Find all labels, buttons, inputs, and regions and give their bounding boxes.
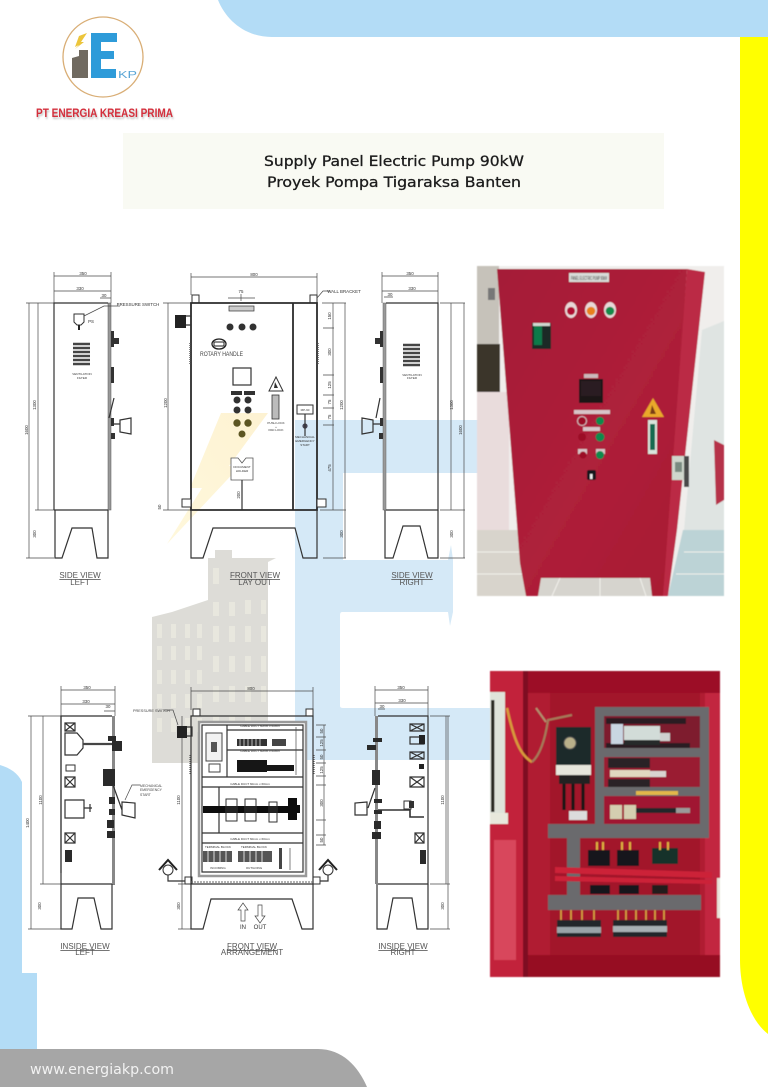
drawing: front view lay out: 75 — [327, 414, 332, 419]
drawing: front view arrangement: 50 — [319, 728, 324, 733]
footer website: www.energiakp.com — [30, 1062, 174, 1078]
drawing: inside view left: EMERGENCY — [140, 788, 163, 792]
logo bolt — [75, 33, 87, 49]
caption inside view right: RIGHT — [391, 948, 416, 957]
drawing: side view right: 300 — [449, 530, 454, 538]
drawing: front view arrangement: CABLE DUCT 60mm x 60mm — [230, 837, 270, 841]
drawing: inside view left: START — [140, 793, 151, 797]
drawing: inside view left — [25, 685, 163, 957]
drawing: front view arrangement: 125 — [319, 766, 324, 774]
logo letter E — [91, 33, 117, 78]
nameplate — [569, 273, 609, 282]
drawing: front view arrangement: 1100 — [176, 795, 181, 805]
caption side view right — [391, 571, 433, 587]
drawing: front view arrangement — [133, 686, 337, 957]
drawing: front view lay out: 475 — [327, 464, 332, 472]
lower terminal blocks — [557, 910, 667, 937]
cabinet front — [497, 269, 687, 596]
drawing: front view arrangement: 800 — [247, 686, 255, 691]
pressure switch label — [133, 709, 178, 725]
drawing: side view left: PRESSURE SWITCH — [117, 302, 159, 307]
main breaker — [556, 727, 591, 820]
drawing: inside view left: 1400 — [25, 818, 30, 828]
caption inside view left: INSIDE VIEW — [60, 942, 110, 951]
drawing: inside view left: 350 — [83, 685, 91, 690]
right yellow side bar — [740, 37, 768, 1034]
caption side view right: SIDE VIEW — [391, 571, 433, 580]
drawing: front view arrangement: 50 — [319, 754, 324, 759]
caption inside view right: INSIDE VIEW — [378, 942, 428, 951]
power meter — [579, 374, 603, 403]
drawing: front view lay out: 1200 — [163, 398, 168, 408]
wall bracket label: WALL BRACKET — [327, 289, 361, 294]
wall bracket label — [317, 289, 361, 298]
caption inside view left — [60, 942, 110, 957]
caption side view left: SIDE VIEW — [59, 571, 101, 580]
drawing: front view arrangement: CABLE DUCT 60mm x 60mm — [240, 724, 280, 728]
drawing: side view left — [24, 271, 159, 587]
drawing: front view lay out: 125 — [327, 381, 332, 389]
drawing: front view lay out: 800 — [250, 272, 258, 277]
title line one: Supply Panel Electric Pump 90kW — [264, 153, 524, 170]
drawing: front view arrangement: INCOMING — [210, 866, 226, 870]
drawing: side view right: VENTILATION — [402, 373, 422, 377]
drawing: front view lay out: 300 — [327, 348, 332, 356]
push buttons — [574, 410, 610, 480]
company name: PT ENERGIA KREASI PRIMA — [36, 108, 173, 120]
left blue side shape — [0, 765, 37, 1050]
drawing: front view lay out: MP-90 — [301, 408, 310, 412]
caption side view left: LEFT — [70, 578, 90, 587]
drawing: front view arrangement: 300 — [176, 902, 181, 910]
door latch — [672, 456, 689, 487]
drawing: side view left: 1300 — [32, 400, 37, 410]
caption side view left — [59, 571, 101, 587]
drawing: side view left: FILTER — [77, 376, 88, 380]
drawing: side view right: 350 — [406, 271, 414, 276]
title line two: Proyek Pompa Tigaraksa Banten — [267, 174, 521, 191]
contactors and red bars — [555, 842, 712, 894]
drawing: front view lay out — [157, 272, 361, 587]
drawing: side view left: 30 — [102, 293, 107, 298]
drawing: front view lay out: MECHANICAL — [295, 435, 315, 439]
drawing: front view arrangement: CABLE DUCT 60mm x 60mm — [230, 782, 270, 786]
drawing: front view lay out: 1200 — [339, 400, 344, 410]
caption inside view right — [378, 942, 428, 957]
drawing: front view lay out: 200 — [236, 491, 241, 499]
caption front view lay out: LAY OUT — [238, 578, 272, 587]
drawing: front view arrangement: 300 — [319, 799, 324, 807]
drawing: front view lay out: PAD LOCK — [269, 428, 283, 432]
drawing: front view arrangement: OUTGOING — [246, 866, 263, 870]
drawing: side view right: 330 — [408, 286, 416, 291]
upper compartment components — [604, 716, 700, 824]
caption front view arrangement — [221, 942, 283, 957]
logo building — [72, 50, 88, 78]
drawing: inside view right — [355, 685, 450, 957]
drawing: front view arrangement: 125 — [319, 739, 324, 747]
watermark lightning — [167, 413, 268, 544]
drawing: side view left: VENTILATION — [72, 372, 92, 376]
photo: interior of red panel — [490, 671, 720, 977]
drawing: inside view right: 300 — [440, 902, 445, 910]
drawing: front view lay out: DOCUMENT — [233, 465, 251, 469]
top right blue header shape — [218, 0, 768, 37]
rotary switch — [532, 323, 551, 349]
drawing: side view left: 300 — [32, 530, 37, 538]
drawing: side view right: 1300 — [449, 400, 454, 410]
photo background — [477, 266, 724, 596]
watermark letter E — [295, 420, 497, 760]
grey mounting frame — [548, 707, 709, 910]
drawing: front view lay out: PUSH LOCK — [267, 421, 285, 425]
drawing: front view arrangement: 50 — [319, 837, 324, 842]
drawing: side view left: 1600 — [24, 425, 29, 435]
drawing: front view lay out: ROTARY HANDLE — [200, 352, 243, 358]
watermark building — [152, 550, 276, 763]
drawing: front view lay out: 300 — [339, 530, 344, 538]
drawing: front view lay out: EMERGENCY — [295, 439, 315, 443]
drawing: front view lay out: 75 — [327, 399, 332, 404]
warning sticker — [642, 398, 664, 454]
drawing: side view left: 330 — [76, 286, 84, 291]
drawing: side view right: FILTER — [407, 376, 418, 380]
in and out arrows: IN — [240, 925, 246, 931]
drawing: inside view left: 330 — [82, 699, 90, 704]
caption inside view left: LEFT — [75, 948, 95, 957]
drawing: front view arrangement: TERMINAL BLOCK — [241, 845, 267, 849]
drawing: front view lay out: + — [275, 425, 277, 429]
drawing: front view lay out: START — [300, 443, 310, 447]
drawing: side view left: PS — [88, 319, 94, 324]
caption front view lay out — [230, 571, 280, 587]
grounding symbols — [159, 860, 337, 881]
wiring — [507, 708, 572, 762]
caption front view arrangement: FRONT VIEW — [227, 942, 277, 951]
logo — [63, 17, 143, 97]
footer bar — [0, 1049, 367, 1087]
drawing: inside view left: 1100 — [38, 795, 43, 805]
drawing: side view right — [362, 271, 465, 587]
logo KP: KP — [118, 70, 137, 81]
drawing: inside view right: 350 — [397, 685, 405, 690]
drawing: front view lay out: 75 — [239, 289, 244, 294]
watermark: building, lightning and letter E — [152, 413, 497, 763]
drawing: front view lay out: 150 — [327, 312, 332, 320]
door terminal strip — [490, 692, 508, 824]
enclosure — [490, 671, 720, 977]
in and out arrows — [238, 903, 267, 931]
title panel — [123, 133, 664, 209]
drawing: side view right: 1600 — [458, 425, 463, 435]
drawing: inside view right: 330 — [398, 698, 406, 703]
logo circle — [63, 17, 143, 97]
drawing: front view lay out: 50 — [157, 504, 162, 509]
drawing: side view left: 350 — [79, 271, 87, 276]
caption side view right: RIGHT — [400, 578, 425, 587]
drawing: inside view right: 30 — [380, 704, 385, 709]
drawing: inside view left: MECHANICAL — [140, 784, 162, 788]
drawing: inside view left: 300 — [37, 902, 42, 910]
indicator lamps — [565, 302, 616, 318]
drawing: front view arrangement: TERMINAL BLOCK — [205, 845, 231, 849]
drawing: front view lay out: HOLDER — [236, 469, 249, 473]
photo: exterior of red panel — [477, 266, 724, 596]
drawing: inside view left: 30 — [106, 704, 111, 709]
nameplate: PANEL ELECTRIC PUMP 90kW — [571, 276, 607, 282]
pressure switch label: PRESSURE SWITCH — [133, 709, 170, 713]
drawing: front view arrangement: CABLE DUCT 60mm x 60mm — [240, 749, 280, 753]
drawing: side view right: 30 — [388, 292, 393, 297]
drawing: inside view right: 1100 — [440, 795, 445, 805]
cabinet side door — [660, 269, 705, 596]
caption front view lay out: FRONT VIEW — [230, 571, 280, 580]
caption front view arrangement: ARRANGEMENT — [221, 948, 283, 957]
in and out arrows: OUT — [254, 925, 267, 931]
